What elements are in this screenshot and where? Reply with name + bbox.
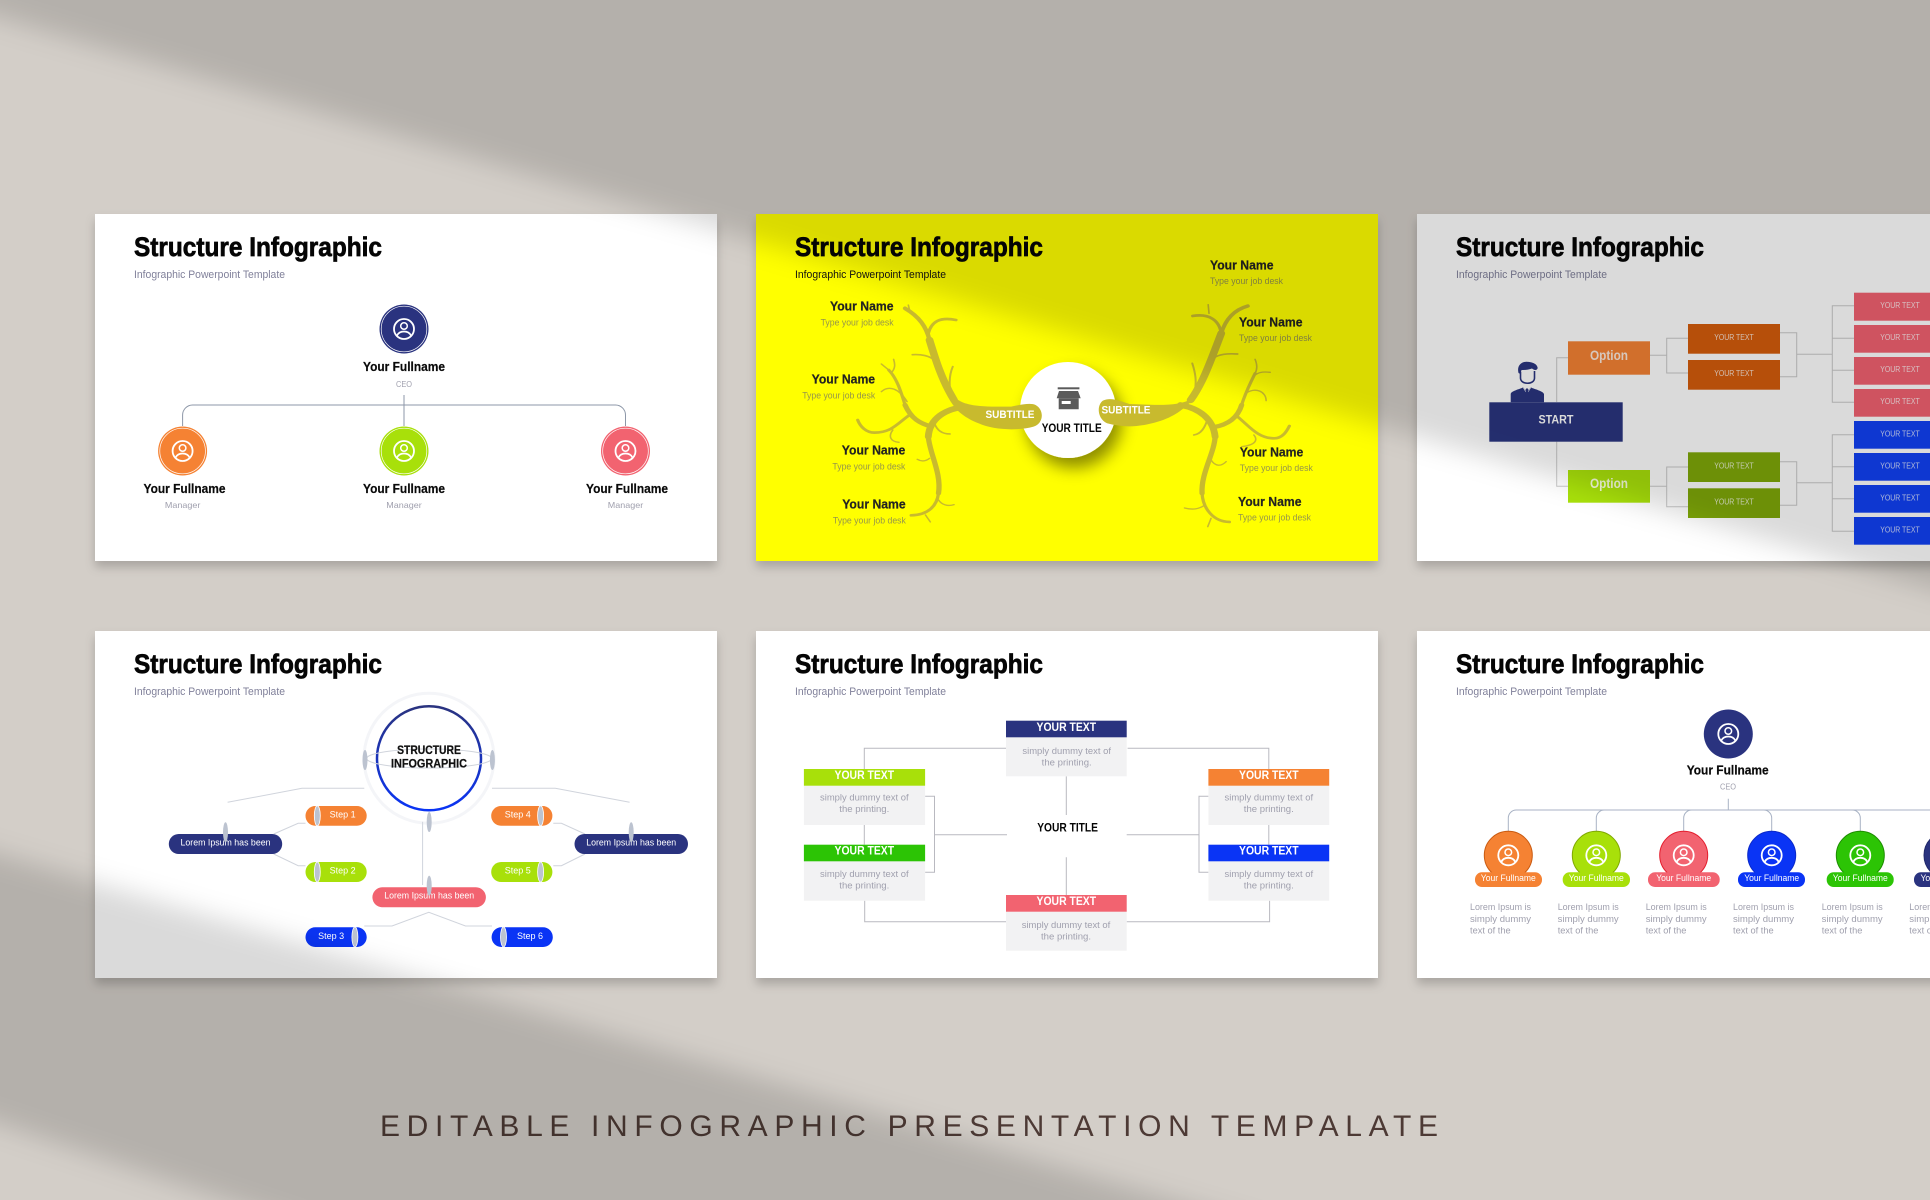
member: green <box>1822 831 1894 936</box>
hub label: INFOGRAPHIC <box>391 756 467 770</box>
label: left name 3: Your Name <box>842 443 905 458</box>
member: blue: text of the <box>1733 925 1774 936</box>
label: right name 3 <box>1240 444 1313 474</box>
member: lime: Your Fullname <box>1569 873 1624 883</box>
labels: level two and three boxes <box>1714 301 1920 534</box>
card: upper right orange <box>1208 769 1329 825</box>
pill: Step 6 <box>492 927 553 947</box>
pill: Step 4 <box>491 806 552 826</box>
member: orange: text of the <box>1470 925 1511 936</box>
box: orange option: Option <box>1590 347 1628 363</box>
pill: right navy: Lorem Ipsum has been <box>586 838 676 849</box>
pill: left navy: Lorem Ipsum has been <box>180 838 270 849</box>
heading: panel 4 title: Structure Infographic <box>134 649 382 679</box>
connector lines <box>228 749 630 926</box>
node: lime manager: Manager <box>386 500 422 510</box>
text: panel 3 subtitle: Infographic Powerpoint Template <box>1456 269 1607 281</box>
pill: Step 5 <box>491 862 552 882</box>
label: left name 2: Type your job desk <box>802 390 875 401</box>
pill: Step 4: Step 4 <box>505 810 531 820</box>
pill: Step 6: Step 6 <box>517 931 543 941</box>
node: CEO: Your Fullname <box>363 359 445 374</box>
pill: Step 1 <box>306 806 367 826</box>
node: CEO <box>1687 710 1769 792</box>
card: bottom red: YOUR TEXT <box>1036 896 1096 908</box>
node: orange manager: Your Fullname <box>144 481 226 496</box>
pill: centre red: Lorem Ipsum has been <box>384 891 474 902</box>
right subtitle: SUBTITLE <box>1102 405 1150 417</box>
card: lower right blue <box>1208 845 1329 901</box>
member: orange: Lorem Ipsum is <box>1470 902 1531 913</box>
card: upper left lime <box>804 769 925 825</box>
boxes: blue level three <box>1854 421 1930 545</box>
box: START <box>1489 402 1623 442</box>
label: left name 2: Your Name <box>812 372 875 387</box>
labels: level two and three boxes: YOUR TEXT <box>1714 462 1754 471</box>
pill: Step 2: Step 2 <box>330 866 356 876</box>
member: red: Lorem Ipsum is <box>1646 902 1707 913</box>
card: top navy: the printing. <box>1042 758 1092 769</box>
text: panel 5 subtitle: Infographic Powerpoint Template <box>795 686 946 698</box>
hub label <box>391 743 467 770</box>
label: right name 4: Type your job desk <box>1238 513 1311 524</box>
labels: level two and three boxes: YOUR TEXT <box>1880 397 1920 406</box>
heading: panel 1 title: Structure Infographic <box>134 232 382 262</box>
label: right name 1: Your Name <box>1210 257 1274 272</box>
pill: right navy <box>574 822 688 854</box>
pill: Step 2 <box>306 862 367 882</box>
heading: panel 6 title: Structure Infographic <box>1456 649 1704 679</box>
member: red: Your Fullname <box>1656 873 1711 883</box>
label: right name 2: Your Name <box>1239 314 1302 329</box>
card: top navy: YOUR TEXT <box>1036 722 1096 734</box>
node: orange manager <box>144 426 226 510</box>
member: lime <box>1558 831 1630 936</box>
card: lower left green <box>804 845 925 901</box>
member: blue: simply dummy <box>1733 914 1794 925</box>
member: green: Your Fullname <box>1833 873 1888 883</box>
text: panel 1 subtitle: Infographic Powerpoint Template <box>134 269 285 281</box>
label: right name 4 <box>1238 494 1311 524</box>
labels: level two and three boxes: YOUR TEXT <box>1880 525 1920 534</box>
member: green: text of the <box>1822 925 1862 936</box>
card: bottom red: simply dummy text of <box>1022 920 1111 931</box>
boxes: pink level three <box>1854 293 1930 417</box>
card: lower left green: simply dummy text of <box>820 869 909 880</box>
centre circle <box>1020 362 1116 458</box>
labels: level two and three boxes: YOUR TEXT <box>1880 301 1920 310</box>
hub rings <box>364 693 494 823</box>
label: right name 4: Your Name <box>1238 494 1302 509</box>
connector arrows <box>864 748 1270 922</box>
card: top navy: simply dummy text of <box>1022 746 1111 757</box>
node: CEO: CEO <box>396 379 412 389</box>
pill: centre red <box>372 876 486 907</box>
text: panel 2 subtitle: Infographic Powerpoint Template <box>795 269 946 281</box>
tree connector lines <box>1557 306 1854 531</box>
label: left name 1: Your Name <box>830 299 894 314</box>
label: left name 4: Your Name <box>842 497 906 512</box>
label: left name 3: Type your job desk <box>832 461 906 472</box>
label: right name 2 <box>1239 314 1312 344</box>
card: upper right orange: simply dummy text of <box>1224 792 1313 803</box>
member: orange <box>1470 831 1542 936</box>
labels: level two and three boxes: YOUR TEXT <box>1880 493 1920 502</box>
panel: yellow mind-map tree <box>756 214 1378 561</box>
centre title: YOUR TITLE <box>1037 820 1098 834</box>
text: panel 4 subtitle: Infographic Powerpoint Template <box>134 686 285 698</box>
panel: CEO org chart with six members <box>1417 631 1930 978</box>
labels: level two and three boxes: YOUR TEXT <box>1880 333 1920 342</box>
boxes: dark orange level two <box>1688 324 1780 390</box>
card: upper left lime: the printing. <box>839 804 889 815</box>
icon: archive box <box>1057 387 1081 409</box>
panel: start and options decision tree <box>1417 214 1930 561</box>
label: left name 2 <box>802 372 875 401</box>
node: lime manager: Your Fullname <box>363 481 445 496</box>
left tree branches <box>858 305 1042 522</box>
labels: level two and three boxes: YOUR TEXT <box>1714 369 1754 378</box>
member: lime: Lorem Ipsum is <box>1558 902 1619 913</box>
node: red manager: Your Fullname <box>586 481 668 496</box>
box: START: START <box>1538 413 1574 427</box>
footer caption: EDITABLE INFOGRAPHIC PRESENTATION TEMPALATE <box>380 1110 1438 1143</box>
member: lime: text of the <box>1558 925 1598 936</box>
card: upper left lime: YOUR TEXT <box>834 770 894 782</box>
node: CEO: Your Fullname <box>1687 762 1769 777</box>
panel: six text boxes around a title <box>756 631 1378 978</box>
member: lime: simply dummy <box>1558 914 1619 925</box>
member: orange: simply dummy <box>1470 914 1531 925</box>
member: blue: Lorem Ipsum is <box>1733 902 1794 913</box>
card: lower left green: the printing. <box>839 881 889 892</box>
member: blue: Your Fullname <box>1744 873 1799 883</box>
member: orange: Your Fullname <box>1481 873 1536 883</box>
box: orange option <box>1568 341 1650 375</box>
label: right name 1: Type your job desk <box>1210 276 1283 287</box>
node: CEO <box>363 304 445 389</box>
hub connector ovals <box>362 750 495 832</box>
label: left name 4 <box>833 497 906 526</box>
card: lower left green: YOUR TEXT <box>834 846 894 858</box>
member: green: simply dummy <box>1822 914 1883 925</box>
hub label: STRUCTURE <box>397 743 461 757</box>
node: red manager: Manager <box>608 500 643 510</box>
pill: left navy <box>169 822 282 854</box>
member: red <box>1646 831 1720 936</box>
labels: level two and three boxes: YOUR TEXT <box>1714 498 1754 507</box>
label: right name 3: Your Name <box>1240 444 1303 459</box>
org chart connector lines <box>183 395 626 426</box>
card: lower right blue: simply dummy text of <box>1224 869 1313 880</box>
card: upper right orange: the printing. <box>1244 804 1294 815</box>
heading: panel 5 title: Structure Infographic <box>795 649 1043 679</box>
heading: panel 3 title: Structure Infographic <box>1456 232 1704 262</box>
label: right name 1 <box>1210 257 1283 287</box>
labels: level two and three boxes: YOUR TEXT <box>1880 365 1920 374</box>
card: upper right orange: YOUR TEXT <box>1239 770 1299 782</box>
node: red manager <box>586 426 668 510</box>
card: lower right blue: YOUR TEXT <box>1239 846 1299 858</box>
pill: Step 3: Step 3 <box>318 931 344 941</box>
member: red: text of the <box>1646 925 1686 936</box>
label: left name 3 <box>832 443 906 472</box>
pill: Step 5: Step 5 <box>505 866 531 876</box>
box: lime option <box>1568 470 1650 503</box>
card: bottom red: the printing. <box>1041 932 1091 943</box>
text: panel 6 subtitle: Infographic Powerpoint Template <box>1456 686 1607 698</box>
node: lime manager <box>363 426 445 510</box>
boxes: olive level two <box>1688 452 1780 518</box>
label: right name 2: Type your job desk <box>1239 333 1312 344</box>
node: CEO: CEO <box>1720 782 1736 792</box>
member: green: Lorem Ipsum is <box>1822 902 1883 913</box>
label: right name 3: Type your job desk <box>1240 463 1313 474</box>
box: lime option: Option <box>1590 475 1628 491</box>
card: lower right blue: the printing. <box>1244 881 1294 892</box>
member: blue <box>1733 831 1805 936</box>
icon: person <box>1511 362 1544 402</box>
card: top navy <box>1006 721 1127 776</box>
label: left name 4: Type your job desk <box>833 515 906 526</box>
label: left name 1 <box>821 299 894 328</box>
labels: level two and three boxes: YOUR TEXT <box>1880 461 1920 470</box>
node: orange manager: Manager <box>165 500 201 510</box>
left subtitle: SUBTITLE <box>986 409 1034 421</box>
right tree branches <box>1099 305 1289 527</box>
card: bottom red <box>1006 895 1127 951</box>
pill: Step 1: Step 1 <box>330 810 356 820</box>
panel: circular hub with steps <box>95 631 717 978</box>
member: navy, cropped at the edge <box>1909 831 1930 936</box>
label: left name 1: Type your job desk <box>821 317 894 328</box>
org chart connector lines <box>1508 799 1930 831</box>
labels: level two and three boxes: YOUR TEXT <box>1714 333 1754 342</box>
member: red: simply dummy <box>1646 914 1707 925</box>
panel: CEO org chart with three managers <box>95 214 717 561</box>
heading: panel 2 title: Structure Infographic <box>795 232 1043 262</box>
labels: level two and three boxes: YOUR TEXT <box>1880 429 1920 438</box>
card: upper left lime: simply dummy text of <box>820 792 909 803</box>
pill: Step 3 <box>306 927 367 947</box>
centre label: YOUR TITLE <box>1042 421 1102 435</box>
